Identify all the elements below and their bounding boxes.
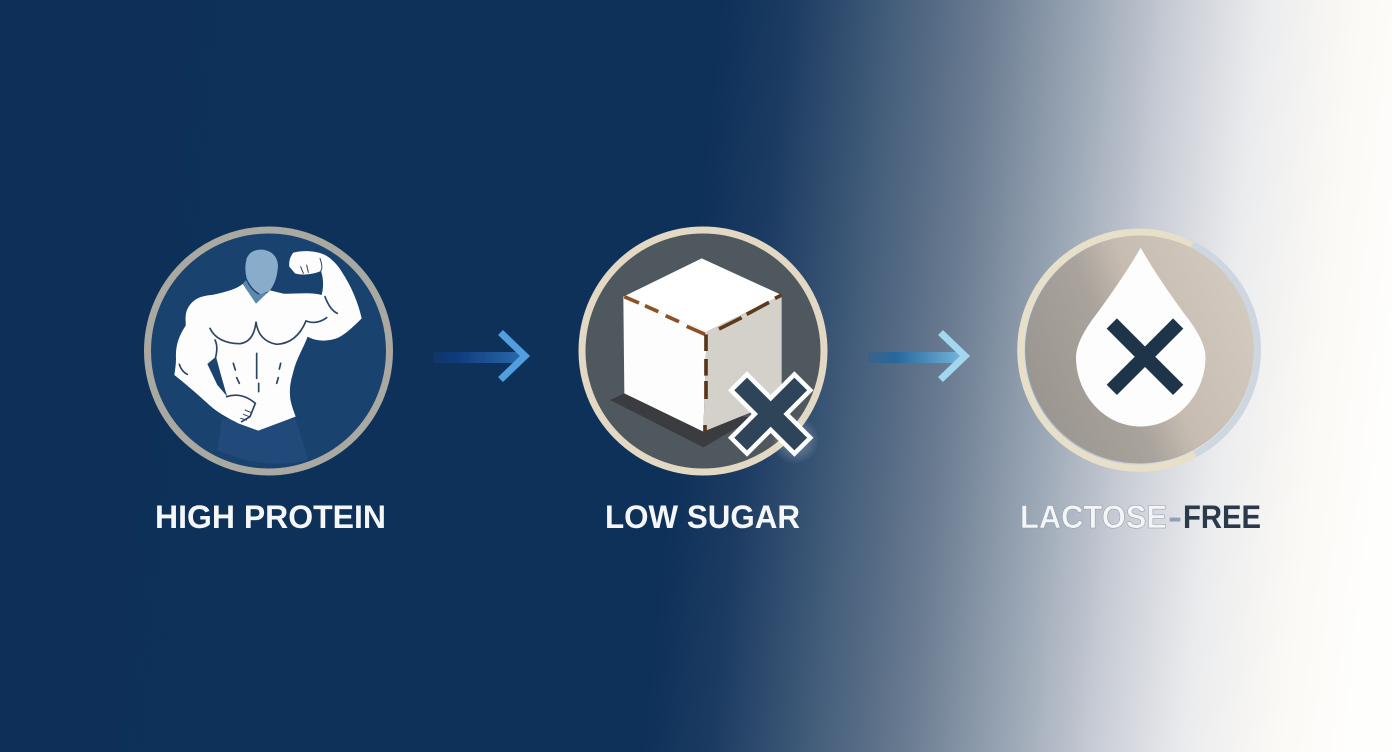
icon: sugar cube xyxy=(610,258,782,447)
label: high protein: HIGH PROTEIN xyxy=(155,499,386,535)
arrow: sugar to lactose xyxy=(868,332,965,380)
panel: high protein xyxy=(148,230,390,535)
icon: blue crescent ring xyxy=(1022,232,1258,468)
icon: muscular figure xyxy=(174,250,362,464)
label: lactose free: FREE xyxy=(1183,499,1261,535)
label: lactose free: LACTOSE xyxy=(1020,499,1167,535)
label: lactose free: - xyxy=(1168,499,1182,535)
icon: circle badge xyxy=(148,230,390,472)
label: lactose free xyxy=(1020,499,1261,535)
panel: low sugar xyxy=(582,230,837,535)
icon: milk drop xyxy=(1076,248,1206,426)
icon: circle badge xyxy=(1026,236,1254,464)
icon: x mark xyxy=(704,348,837,480)
icon: x mark xyxy=(1112,324,1178,390)
icon: cream ring arc xyxy=(1021,232,1195,468)
label: low sugar: LOW SUGAR xyxy=(605,499,800,535)
panel: lactose free xyxy=(1020,232,1261,535)
icon: circle badge xyxy=(582,230,824,472)
arrow: protein to sugar xyxy=(433,332,525,380)
